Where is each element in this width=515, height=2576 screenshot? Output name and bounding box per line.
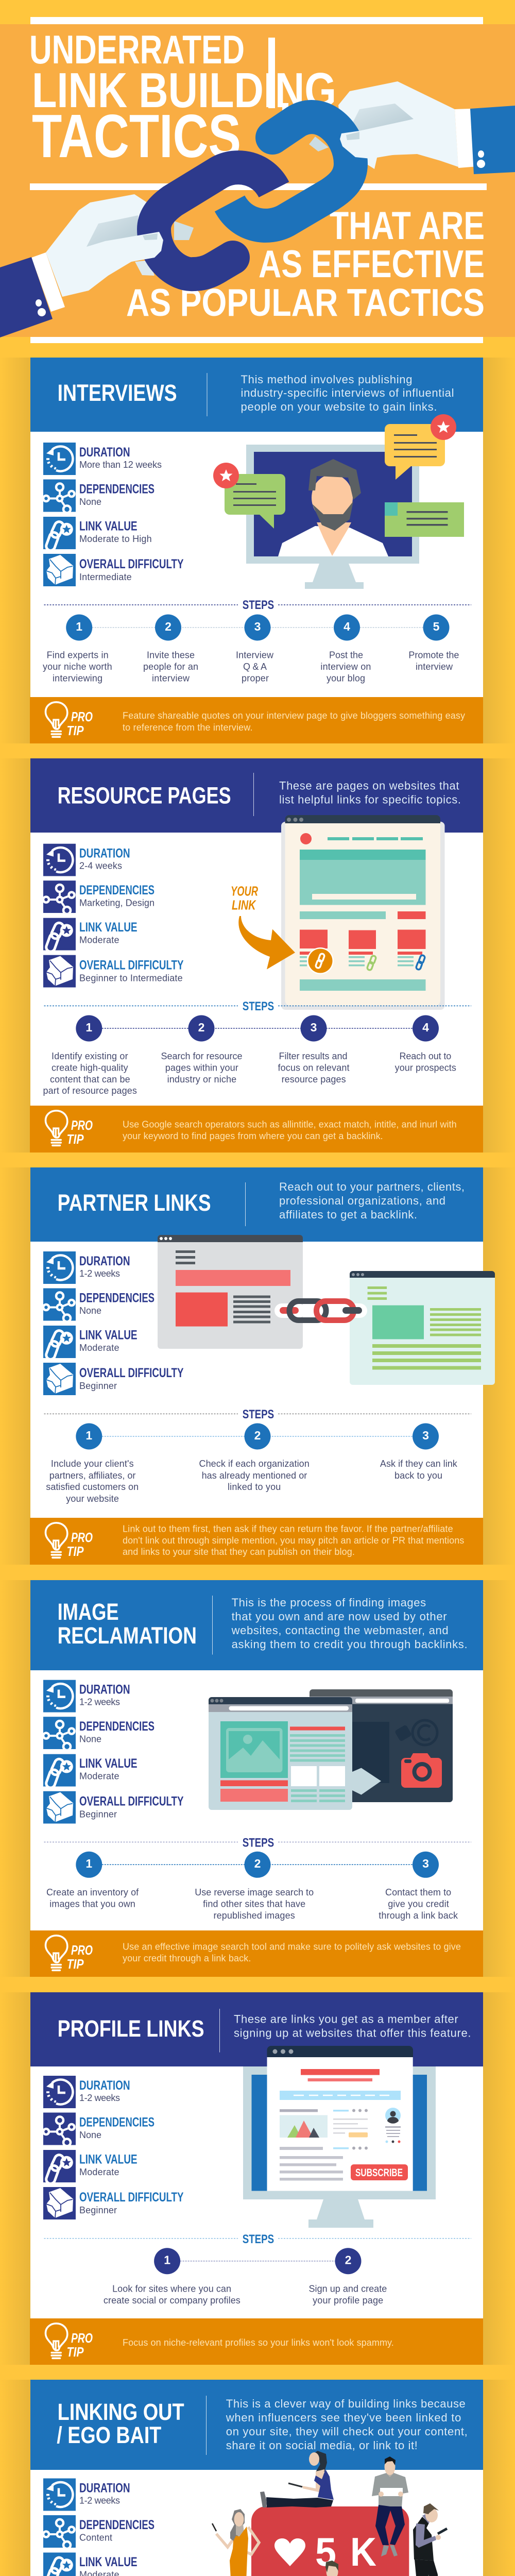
panel header: partner links: professional organizations, and xyxy=(279,1194,445,1207)
steps: your blog xyxy=(327,673,365,683)
steps: Filter results and xyxy=(279,1051,347,1061)
pro tip xyxy=(30,1930,483,1977)
panel header: interviews: industry-specific interviews of influential xyxy=(241,386,454,399)
panel header: image reclamation xyxy=(30,1580,483,1670)
steps: STEPS xyxy=(243,598,274,612)
stats list: Moderate xyxy=(79,935,119,945)
pro tip: TIP xyxy=(67,1131,84,1147)
illustration: browsers with reused image and camera xyxy=(209,1689,453,1810)
stats list: Beginner xyxy=(79,2205,117,2215)
steps: 3 xyxy=(422,1429,429,1442)
likes count: 5 xyxy=(315,2529,336,2574)
stats list: LINK VALUE xyxy=(79,1328,138,1343)
pro tip: Link out to them first, then ask if they can return the favor. If the partner/affiliate xyxy=(123,1523,453,1534)
steps: 1 xyxy=(85,1429,92,1442)
steps: STEPS xyxy=(243,1408,274,1421)
stats list: DURATION xyxy=(79,846,130,861)
pro tip: PRO xyxy=(71,1530,93,1545)
stats list: OVERALL DIFFICULTY xyxy=(79,1366,184,1380)
panel header: linking out: This is a clever way of building links because xyxy=(226,2397,466,2410)
stats list: DEPENDENCIES xyxy=(79,1291,154,1306)
panel header: partner links: affiliates to get a backlink. xyxy=(279,1208,417,1221)
steps: 3 xyxy=(311,1021,317,1034)
panel header: image reclamation: This is the process of finding images xyxy=(232,1596,426,1609)
title: TACTICS xyxy=(32,102,241,171)
steps: create high-quality xyxy=(52,1062,128,1073)
steps: industry or niche xyxy=(167,1074,236,1084)
pro tip: PRO xyxy=(71,709,93,724)
pro tip: and links to your site that they can publish on their blog. xyxy=(123,1547,355,1557)
stats list: More than 12 weeks xyxy=(79,460,162,470)
stats list: OVERALL DIFFICULTY xyxy=(79,1794,184,1809)
icon: chain xyxy=(274,1301,367,1320)
title: LINK BUILDING xyxy=(32,63,336,118)
illustration: resource page with your link xyxy=(231,815,445,1010)
pro tip: your credit through a link back. xyxy=(123,1953,251,1963)
person: seated man with tablet xyxy=(372,2456,408,2556)
stats list: DURATION xyxy=(79,2481,130,2496)
stats list: DURATION xyxy=(79,2078,130,2093)
pro tip: TIP xyxy=(67,1956,84,1972)
panel header: resource pages xyxy=(30,758,483,833)
stats list xyxy=(43,443,184,586)
steps: part of resource pages xyxy=(43,1086,137,1096)
likes count xyxy=(315,2529,376,2574)
stats list: LINK VALUE xyxy=(79,2555,138,2569)
person: seated woman with phone xyxy=(260,2451,334,2507)
stats list xyxy=(43,2076,184,2219)
illustration: people around 5K likes bubble xyxy=(210,2451,455,2576)
panel header: profile links: These are links you get as a member after xyxy=(234,2012,458,2025)
panel header: image reclamation: that you own and are now used by other xyxy=(232,1610,447,1623)
steps: 4 xyxy=(344,620,350,633)
stats list xyxy=(43,2478,184,2576)
steps: 2 xyxy=(198,1021,204,1034)
steps: pages within your xyxy=(165,1062,238,1073)
stats list: None xyxy=(79,497,101,507)
pro tip: TIP xyxy=(67,723,84,738)
panel header: image reclamation: IMAGE xyxy=(58,1599,119,1625)
steps: partners, affiliates, or xyxy=(49,1470,135,1481)
stats list: OVERALL DIFFICULTY xyxy=(79,557,184,571)
pro tip xyxy=(30,1518,483,1565)
stats list: None xyxy=(79,1734,101,1744)
panel header: interviews: INTERVIEWS xyxy=(58,380,177,406)
pro tip: Focus on niche-relevant profiles so your links won't look spammy. xyxy=(123,2337,394,2348)
callout: your link xyxy=(231,884,258,913)
panel header: resource pages: RESOURCE PAGES xyxy=(58,783,231,809)
panel header: image reclamation: asking them to credit you through backlinks. xyxy=(232,1638,468,1651)
stats list: LINK VALUE xyxy=(79,920,138,935)
illustration: two websites joined by a chain xyxy=(158,1235,495,1385)
panel header: image reclamation: RECLAMATION xyxy=(58,1622,197,1649)
button: subscribe: SUBSCRIBE xyxy=(355,2167,403,2179)
likes count: K xyxy=(350,2529,376,2574)
steps: STEPS xyxy=(243,1836,274,1850)
stats list: DEPENDENCIES xyxy=(79,482,154,497)
panel header: partner links: PARTNER LINKS xyxy=(58,1190,211,1216)
panel header: profile links: signing up at websites that offer this feature. xyxy=(234,2027,471,2039)
steps xyxy=(44,1836,471,1921)
stats list: DEPENDENCIES xyxy=(79,2115,154,2130)
steps: Post the xyxy=(329,650,363,660)
stats list: None xyxy=(79,2130,101,2140)
steps: images that you own xyxy=(49,1899,135,1909)
panel: image reclamation xyxy=(30,1580,483,1977)
steps: your prospects xyxy=(395,1062,456,1073)
stats list: Moderate xyxy=(79,1771,119,1782)
button: subscribe xyxy=(351,2164,408,2180)
stats list: Moderate xyxy=(79,1343,119,1353)
steps: 1 xyxy=(85,1857,92,1870)
steps: create social or company profiles xyxy=(104,2295,241,2306)
steps: 1 xyxy=(85,1021,92,1034)
stats list: Content xyxy=(79,2533,112,2543)
panel header: linking out: share it on social media, or link to it! xyxy=(226,2439,418,2452)
steps xyxy=(44,1408,471,1504)
stats list: 2-4 weeks xyxy=(79,861,122,871)
steps: Reach out to xyxy=(400,1051,451,1061)
steps: Interview xyxy=(236,650,274,660)
panel header: partner links: Reach out to your partners, clients, xyxy=(279,1180,465,1193)
steps: resource pages xyxy=(282,1074,346,1084)
pro tip: PRO xyxy=(71,1942,93,1958)
stats list: Beginner to Intermediate xyxy=(79,973,183,984)
stats list: None xyxy=(79,1306,101,1316)
steps: interview xyxy=(152,673,190,683)
steps: Contact them to xyxy=(385,1887,451,1897)
stats list: DURATION xyxy=(79,445,130,460)
stats list: Marketing, Design xyxy=(79,898,154,908)
stats list: 1-2 weeks xyxy=(79,2496,120,2506)
steps: has already mentioned or xyxy=(202,1470,307,1481)
steps: content that can be xyxy=(50,1074,130,1084)
panel header: resource pages: list helpful links for specific topics. xyxy=(279,793,461,806)
stats list xyxy=(43,1680,184,1824)
pro tip: TIP xyxy=(67,1544,84,1559)
stats list: OVERALL DIFFICULTY xyxy=(79,2190,184,2205)
panel header: linking out: LINKING OUT xyxy=(58,2399,184,2425)
pro tip: to reference from the interview. xyxy=(123,722,252,733)
steps: give you credit xyxy=(388,1899,449,1909)
steps: Look for sites where you can xyxy=(112,2283,231,2294)
panel header: profile links xyxy=(30,1992,483,2066)
stats list: DEPENDENCIES xyxy=(79,883,154,897)
title: UNDERRATED xyxy=(29,27,245,72)
steps: 2 xyxy=(345,2253,351,2267)
steps: find other sites that have xyxy=(203,1899,305,1909)
pro tip: Use an effective image search tool and make sure to politely ask websites to give xyxy=(123,1942,461,1952)
stats list: Beginner xyxy=(79,1809,117,1820)
steps: Create an inventory of xyxy=(46,1887,139,1897)
pro tip: your keyword to find pages from where you can get a backlink. xyxy=(123,1131,383,1141)
steps: Identify existing or xyxy=(52,1051,128,1061)
person: seated man with laptop xyxy=(304,2561,355,2576)
steps: interview on xyxy=(320,662,371,672)
stats list: DURATION xyxy=(79,1254,130,1268)
panel header: linking out: when influencers see they've been linked to xyxy=(226,2411,461,2424)
steps xyxy=(44,2232,471,2306)
steps: interview xyxy=(416,662,453,672)
steps: Include your client's xyxy=(51,1459,134,1469)
pro tip xyxy=(30,697,483,743)
person: man in vest with phone xyxy=(413,2503,448,2576)
stats list xyxy=(43,844,184,988)
panel: profile links xyxy=(30,1992,483,2365)
steps: satisfied customers on xyxy=(46,1482,139,1492)
illustration: profile page on monitor xyxy=(243,2046,436,2228)
steps: republished images xyxy=(213,1910,295,1921)
steps: back to you xyxy=(394,1470,442,1481)
hero banner xyxy=(0,17,515,343)
pro tip xyxy=(30,2318,483,2365)
stats list: 1-2 weeks xyxy=(79,1268,120,1279)
steps xyxy=(43,598,471,683)
steps: Invite these xyxy=(147,650,195,660)
panel: resource pages xyxy=(30,758,483,1153)
steps xyxy=(43,999,471,1096)
steps: STEPS xyxy=(243,999,274,1013)
steps: 5 xyxy=(433,620,440,633)
pro tip: TIP xyxy=(67,2344,84,2360)
panel header: linking out xyxy=(30,2380,483,2470)
steps: Q & A xyxy=(243,662,267,672)
steps: proper xyxy=(242,673,269,683)
panel: partner links xyxy=(30,1167,495,1565)
steps: Sign up and create xyxy=(309,2283,387,2294)
stats list xyxy=(43,1251,184,1395)
stats list: LINK VALUE xyxy=(79,519,138,534)
pro tip: Use Google search operators such as allintitle, exact match, intitle, and inurl with xyxy=(123,1120,457,1130)
steps: 2 xyxy=(254,1429,261,1442)
steps: interviewing xyxy=(53,673,102,683)
illustration: expert on monitor with speech bubbles xyxy=(213,414,464,589)
pro tip: PRO xyxy=(71,2330,93,2346)
callout: your link: LINK xyxy=(232,897,256,913)
panel header: image reclamation: websites, contacting the webmaster, and xyxy=(231,1624,449,1637)
steps: Search for resource xyxy=(161,1051,242,1061)
panel header: resource pages: These are pages on websites that xyxy=(279,779,459,792)
steps: your profile page xyxy=(313,2295,383,2306)
stats list: 1-2 weeks xyxy=(79,2093,120,2103)
steps: Promote the xyxy=(408,650,459,660)
panel: linking out / ego bait xyxy=(30,2380,483,2576)
stats list: LINK VALUE xyxy=(79,1756,138,1771)
pro tip: PRO xyxy=(71,1117,93,1133)
arrow xyxy=(238,916,295,970)
person: woman in orange dress xyxy=(212,2509,259,2576)
panel header: interviews: This method involves publishing xyxy=(241,373,412,386)
panel header: linking out: / EGO BAIT xyxy=(57,2422,161,2448)
steps: 1 xyxy=(164,2253,170,2267)
steps: Use reverse image search to xyxy=(195,1887,314,1897)
panel header: linking out: on your site, they will check out your content, xyxy=(226,2425,468,2438)
panel header: interviews xyxy=(30,358,483,432)
navy chain link xyxy=(154,167,274,275)
stats list: Intermediate xyxy=(79,572,132,582)
steps: 4 xyxy=(422,1021,429,1034)
steps: STEPS xyxy=(243,2232,274,2246)
stats list: Moderate to High xyxy=(79,534,152,544)
panel header: partner links xyxy=(30,1167,483,1242)
stats list: DEPENDENCIES xyxy=(79,2518,154,2532)
callout: your link: YOUR xyxy=(231,884,258,899)
steps: 3 xyxy=(422,1857,429,1870)
pro tip: don't link out through simple mention, you may pitch an article or PR that mentions xyxy=(123,1535,464,1546)
steps: linked to you xyxy=(228,1482,281,1492)
stats list: OVERALL DIFFICULTY xyxy=(79,958,184,973)
panel header: profile links: PROFILE LINKS xyxy=(58,2015,204,2042)
stats list: DURATION xyxy=(79,1683,130,1697)
pro tip: Feature shareable quotes on your interview page to give bloggers something easy xyxy=(123,710,465,721)
arrow xyxy=(352,1768,381,1795)
steps: through a link back xyxy=(379,1910,458,1921)
steps: Check if each organization xyxy=(199,1459,310,1469)
steps: Ask if they can link xyxy=(380,1459,458,1469)
stats list: DEPENDENCIES xyxy=(79,1719,154,1734)
stats list: 1-2 weeks xyxy=(79,1697,120,1707)
panel header: interviews: people on your website to gain links. xyxy=(241,400,437,413)
steps: 2 xyxy=(165,620,171,633)
blue chain link xyxy=(230,117,351,226)
stats list: LINK VALUE xyxy=(79,2153,138,2167)
title xyxy=(29,27,485,324)
stats list: Beginner xyxy=(79,1381,117,1391)
steps: 2 xyxy=(254,1857,261,1870)
steps: your website xyxy=(66,1494,119,1504)
illustration: hands joining chain links xyxy=(0,81,515,337)
steps: 1 xyxy=(76,620,82,633)
steps: focus on relevant xyxy=(278,1062,349,1073)
steps: 3 xyxy=(254,620,261,633)
pro tip xyxy=(30,1106,483,1153)
steps: Find experts in xyxy=(47,650,109,660)
steps: your niche worth xyxy=(43,662,112,672)
panel: interviews xyxy=(30,358,483,743)
stats list: Moderate xyxy=(79,2167,119,2177)
steps: people for an xyxy=(143,662,198,672)
